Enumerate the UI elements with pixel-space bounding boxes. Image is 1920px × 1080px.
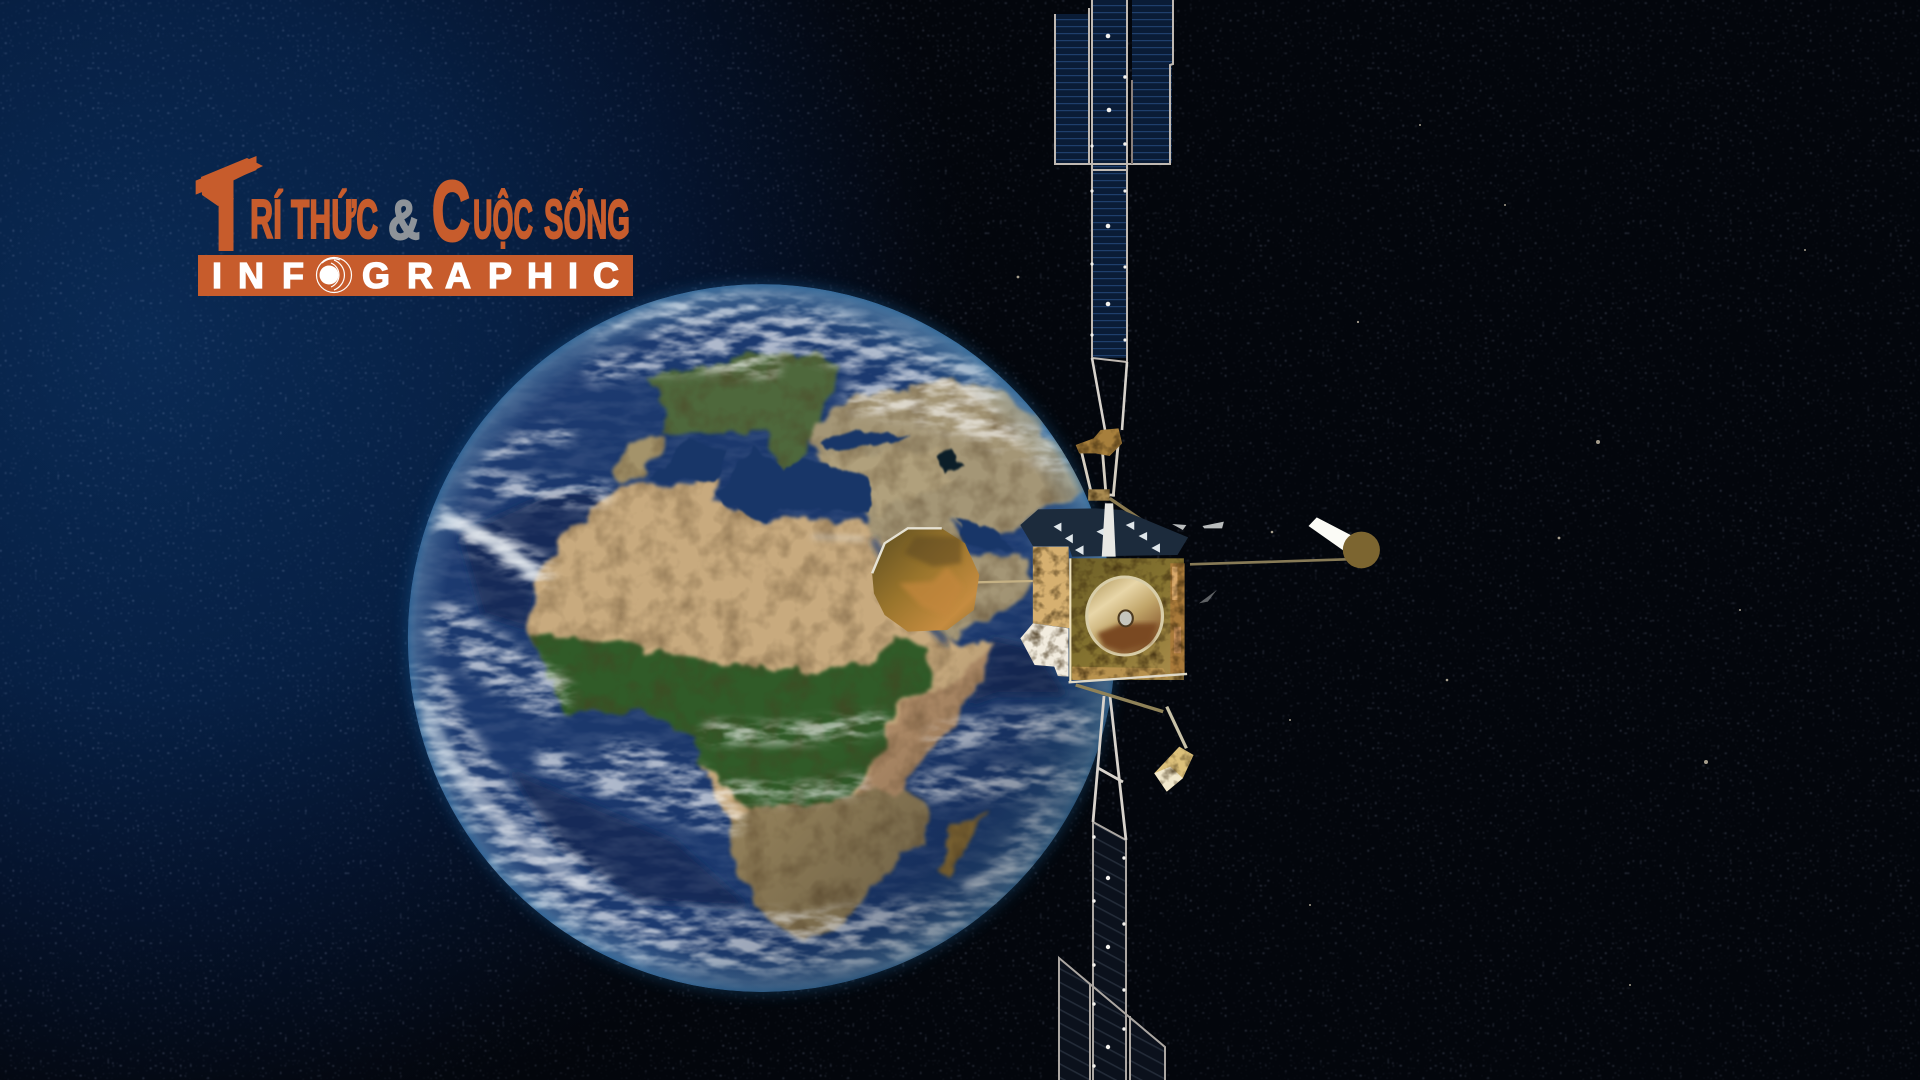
logo title text: C bbox=[432, 164, 470, 258]
land: Europe bbox=[646, 350, 841, 471]
bright cloud streaks bbox=[428, 303, 1011, 888]
left side radiator panel bbox=[1020, 547, 1070, 677]
logo title text: & bbox=[388, 188, 420, 251]
satellite struts upper bbox=[1092, 358, 1127, 430]
red sea bbox=[873, 539, 946, 643]
upper side panels bbox=[1055, 14, 1090, 163]
antenna boom left bbox=[977, 581, 1033, 582]
back structure bbox=[1172, 522, 1224, 603]
white mast bbox=[1102, 503, 1116, 557]
logo big letter T: T bbox=[194, 129, 258, 295]
solar array: lower bbox=[1058, 822, 1165, 1080]
lower center panel bbox=[1093, 822, 1126, 1080]
upper hinge mechanism bbox=[1076, 428, 1122, 501]
body front face bbox=[1070, 558, 1185, 680]
solar array: upper bbox=[1055, 0, 1173, 362]
land: southern Africa bbox=[731, 789, 926, 939]
logo title text: UỘC bbox=[473, 188, 533, 250]
satellite struts lower bbox=[1093, 696, 1126, 840]
dark top deck with white markers bbox=[1020, 508, 1188, 557]
earth globe bbox=[400, 270, 1135, 1010]
logo swirl icon bbox=[316, 258, 352, 292]
atmosphere rim bbox=[408, 284, 1116, 992]
logo title text: SỐNG bbox=[544, 188, 630, 250]
body bottom edge bbox=[1069, 674, 1187, 682]
lower side panels bbox=[1058, 958, 1090, 1080]
upper center panel bbox=[1092, 0, 1127, 358]
logo title text: THỨC bbox=[291, 188, 378, 250]
lower module bbox=[1154, 747, 1194, 792]
main dish on body bbox=[1087, 577, 1162, 655]
earth atmosphere glow bbox=[406, 282, 1118, 994]
clouds bbox=[423, 298, 1089, 942]
logo bbox=[196, 156, 633, 296]
dark ocean patches bbox=[460, 492, 1066, 907]
logo infographic text: INF O GRAPHIC bbox=[212, 255, 619, 296]
thin haze wisps over the ocean bbox=[412, 290, 1106, 983]
logo orange band bbox=[198, 255, 633, 296]
land: Iberia bbox=[611, 440, 666, 480]
reflector antenna left bbox=[872, 528, 979, 632]
logo title text: RÍ bbox=[250, 188, 283, 250]
right antenna with white cone bbox=[1309, 517, 1380, 568]
upper arm bbox=[1110, 498, 1179, 546]
land: Eurasia bbox=[804, 383, 1093, 645]
ocean bbox=[408, 284, 1116, 992]
boom right bbox=[1190, 559, 1347, 564]
land: Madagascar bbox=[937, 808, 984, 880]
satellite bus bbox=[872, 428, 1380, 792]
right side detail bbox=[1170, 563, 1185, 673]
land: Africa bbox=[529, 480, 993, 939]
blurred land base so the continents read softly bbox=[529, 350, 1093, 939]
land: Turkey and Levant bbox=[816, 447, 951, 511]
land: Sahel and Congo forest bbox=[531, 633, 928, 808]
land: east Africa bbox=[859, 643, 993, 794]
seas bbox=[650, 428, 1015, 548]
logo big letter T bbox=[196, 156, 263, 251]
connector struts and hinge bbox=[1081, 440, 1119, 497]
lower arm bbox=[1076, 685, 1163, 712]
logo title text bbox=[250, 164, 630, 258]
